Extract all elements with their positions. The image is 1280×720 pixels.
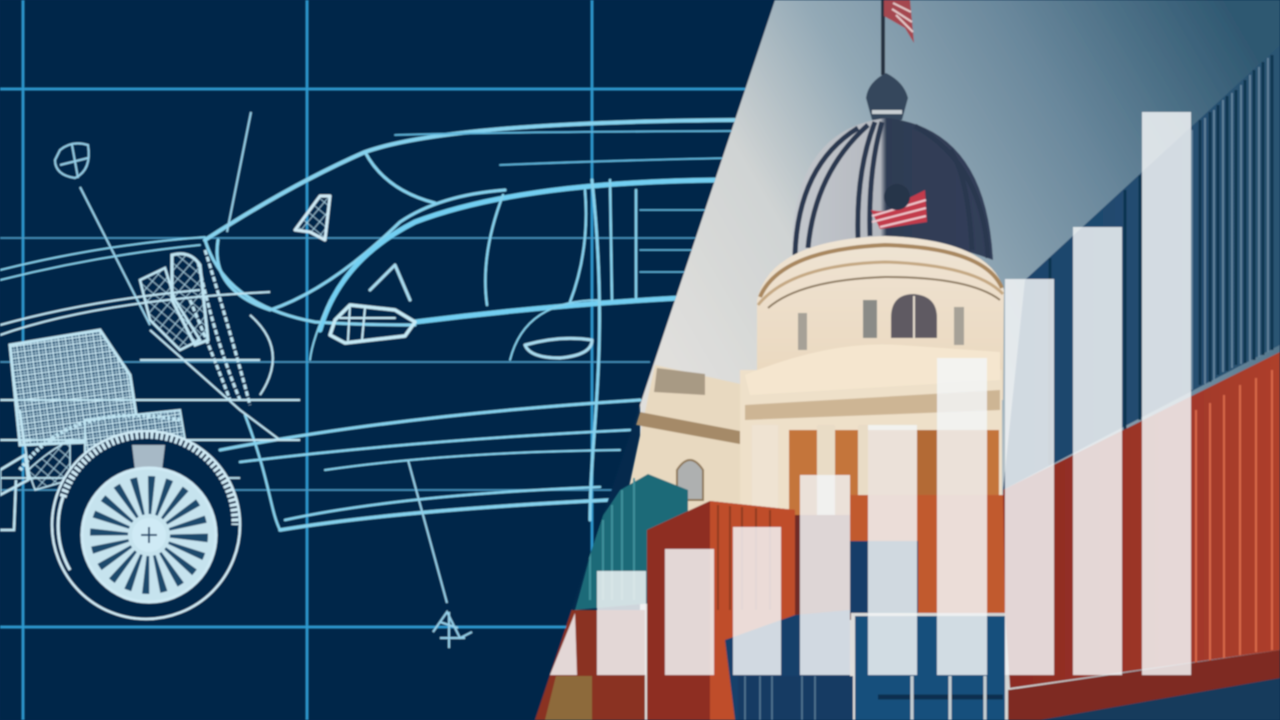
leader lines and marks [55, 112, 472, 648]
right base [1008, 650, 1280, 720]
bar 10 [1142, 112, 1191, 675]
upper mid container [850, 495, 1005, 613]
flag on pole [881, 0, 914, 75]
bar 8 [1005, 279, 1054, 675]
blueprint grid [0, 0, 750, 720]
door handle and mirror [525, 338, 592, 358]
bar 6 [868, 425, 917, 675]
red centre container [647, 501, 795, 720]
dome [792, 118, 993, 260]
left wing [622, 365, 760, 520]
drum windows [798, 294, 964, 350]
bar 9 [1073, 227, 1122, 675]
panel: sky background [640, 0, 1280, 720]
lower-left container [535, 610, 645, 720]
teal container [575, 474, 688, 610]
tyre [52, 431, 240, 619]
blueprint drawing [0, 0, 750, 720]
car outline [0, 120, 740, 530]
bar 7 [937, 358, 987, 675]
dark gap container [795, 515, 851, 620]
chart: rising translucent bars [550, 112, 1191, 675]
blue base container [855, 616, 1005, 720]
bar 5 [800, 475, 850, 675]
right red stack [1003, 352, 1280, 688]
bar 1 [550, 613, 577, 675]
engine bay [0, 250, 300, 530]
navy containers [725, 610, 850, 720]
portico [740, 370, 1002, 520]
lantern [866, 73, 908, 120]
front wheel [52, 431, 240, 619]
bar 3 [665, 549, 714, 675]
bar 2 [597, 571, 646, 675]
panel: capitol building [622, 0, 1004, 520]
panel: blueprint background [0, 0, 775, 720]
drum [757, 236, 1004, 400]
dome flag [871, 190, 927, 229]
bar 4 [733, 527, 781, 675]
rim [82, 468, 216, 602]
panel: shipping containers [535, 45, 1280, 720]
right blue stack [1003, 45, 1280, 490]
